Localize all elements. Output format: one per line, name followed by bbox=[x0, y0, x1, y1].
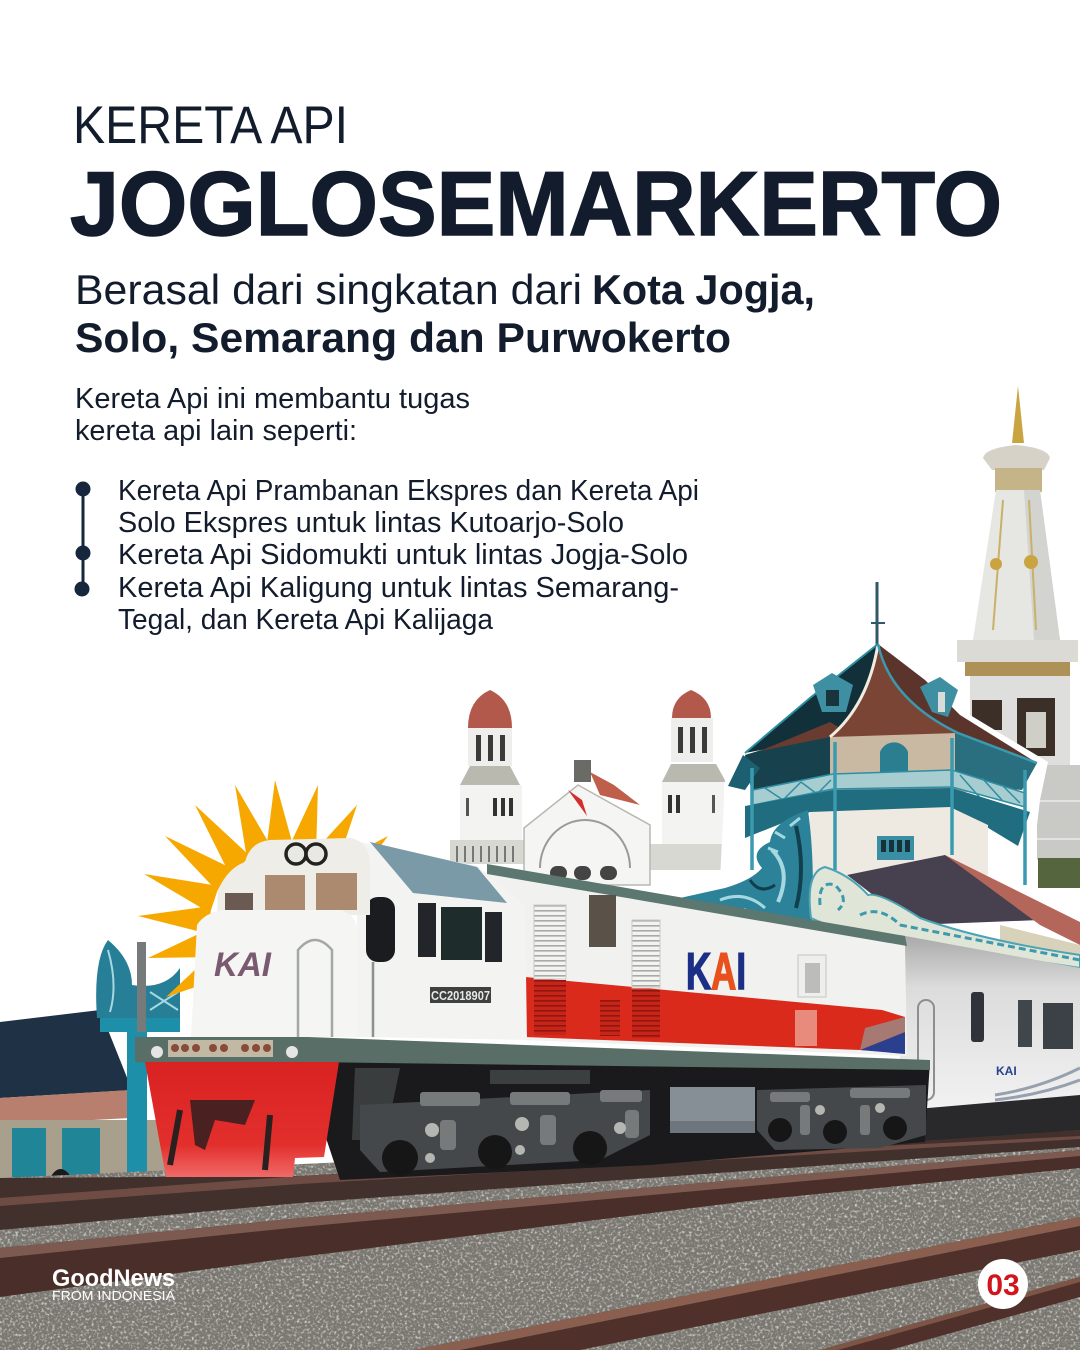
subtitle bbox=[75, 266, 815, 361]
sunburst bbox=[138, 780, 388, 997]
illustration: locomotive: KAI bbox=[214, 946, 273, 984]
list of trains: Solo Ekspres untuk lintas Kutoarjo-Solo bbox=[118, 507, 624, 539]
nose bbox=[191, 910, 357, 1037]
under deck bbox=[745, 788, 1030, 846]
illustration: sticker outline behind pavilion bbox=[720, 636, 1080, 975]
list of trains bbox=[118, 475, 699, 636]
illustration: locomotive: CC2018907 bbox=[431, 988, 490, 1003]
long hood bbox=[487, 872, 907, 1056]
page number badge: 03 bbox=[986, 1269, 1020, 1302]
illustration: passenger carriage bbox=[900, 935, 1080, 1142]
intro text: Kereta Api ini membantu tugas bbox=[75, 383, 470, 415]
bullet timeline bbox=[74, 482, 90, 596]
subtitle: Berasal dari singkatan dari bbox=[75, 266, 582, 313]
title: JOGLOSEMARKERTO: JOGLOSEMARKERTO bbox=[70, 154, 1002, 255]
list of trains: Kereta Api Sidomukti untuk lintas Jogja-Solo bbox=[118, 539, 688, 571]
cab front bbox=[217, 838, 370, 915]
intro text: kereta api lain seperti: bbox=[75, 415, 357, 447]
balcony walls bbox=[800, 730, 970, 792]
undercarriage bbox=[300, 1060, 930, 1180]
subtitle: Kota Jogja, bbox=[592, 266, 815, 313]
logo: GoodNews from Indonesia: GoodNews bbox=[52, 1265, 175, 1292]
cab bbox=[357, 842, 527, 1040]
illustration: passenger carriage: KAI bbox=[996, 1064, 1017, 1078]
illustration: Lawang Sewu building bbox=[450, 690, 730, 885]
illustration: teal pavilion bbox=[728, 582, 1037, 885]
illustration: cream wave ornament bbox=[810, 867, 1080, 968]
red stripe bbox=[525, 977, 905, 1053]
intro text bbox=[75, 383, 470, 447]
illustration: locomotive bbox=[135, 838, 930, 1180]
illustration: dragon ornament bbox=[680, 810, 813, 922]
illustration: lower roof bbox=[847, 855, 1080, 962]
illustration: left station building bbox=[0, 940, 180, 1180]
KAI logo side: KAI bbox=[686, 943, 746, 1001]
list of trains: Kereta Api Prambanan Ekspres dan Kereta Api bbox=[118, 475, 699, 507]
illustration: Tugu Jogja monument bbox=[957, 386, 1080, 888]
list of trains: Kereta Api Kaligung untuk lintas Semarang- bbox=[118, 572, 679, 604]
balcony railing bbox=[753, 770, 1025, 807]
subtitle: Solo, Semarang dan Purwokerto bbox=[75, 314, 731, 361]
roof bbox=[745, 644, 878, 753]
red pilot bbox=[145, 1062, 339, 1177]
frame band bbox=[135, 1037, 930, 1070]
dormers bbox=[813, 673, 853, 712]
logo: GoodNews from Indonesia: FROM INDONESIA bbox=[52, 1289, 176, 1303]
list of trains: Tegal, dan Kereta Api Kalijaga bbox=[118, 604, 494, 636]
title: KERETA API: KERETA API bbox=[73, 96, 348, 155]
railway tracks and ballast bbox=[0, 1125, 1080, 1350]
page number badge bbox=[978, 1259, 1028, 1309]
